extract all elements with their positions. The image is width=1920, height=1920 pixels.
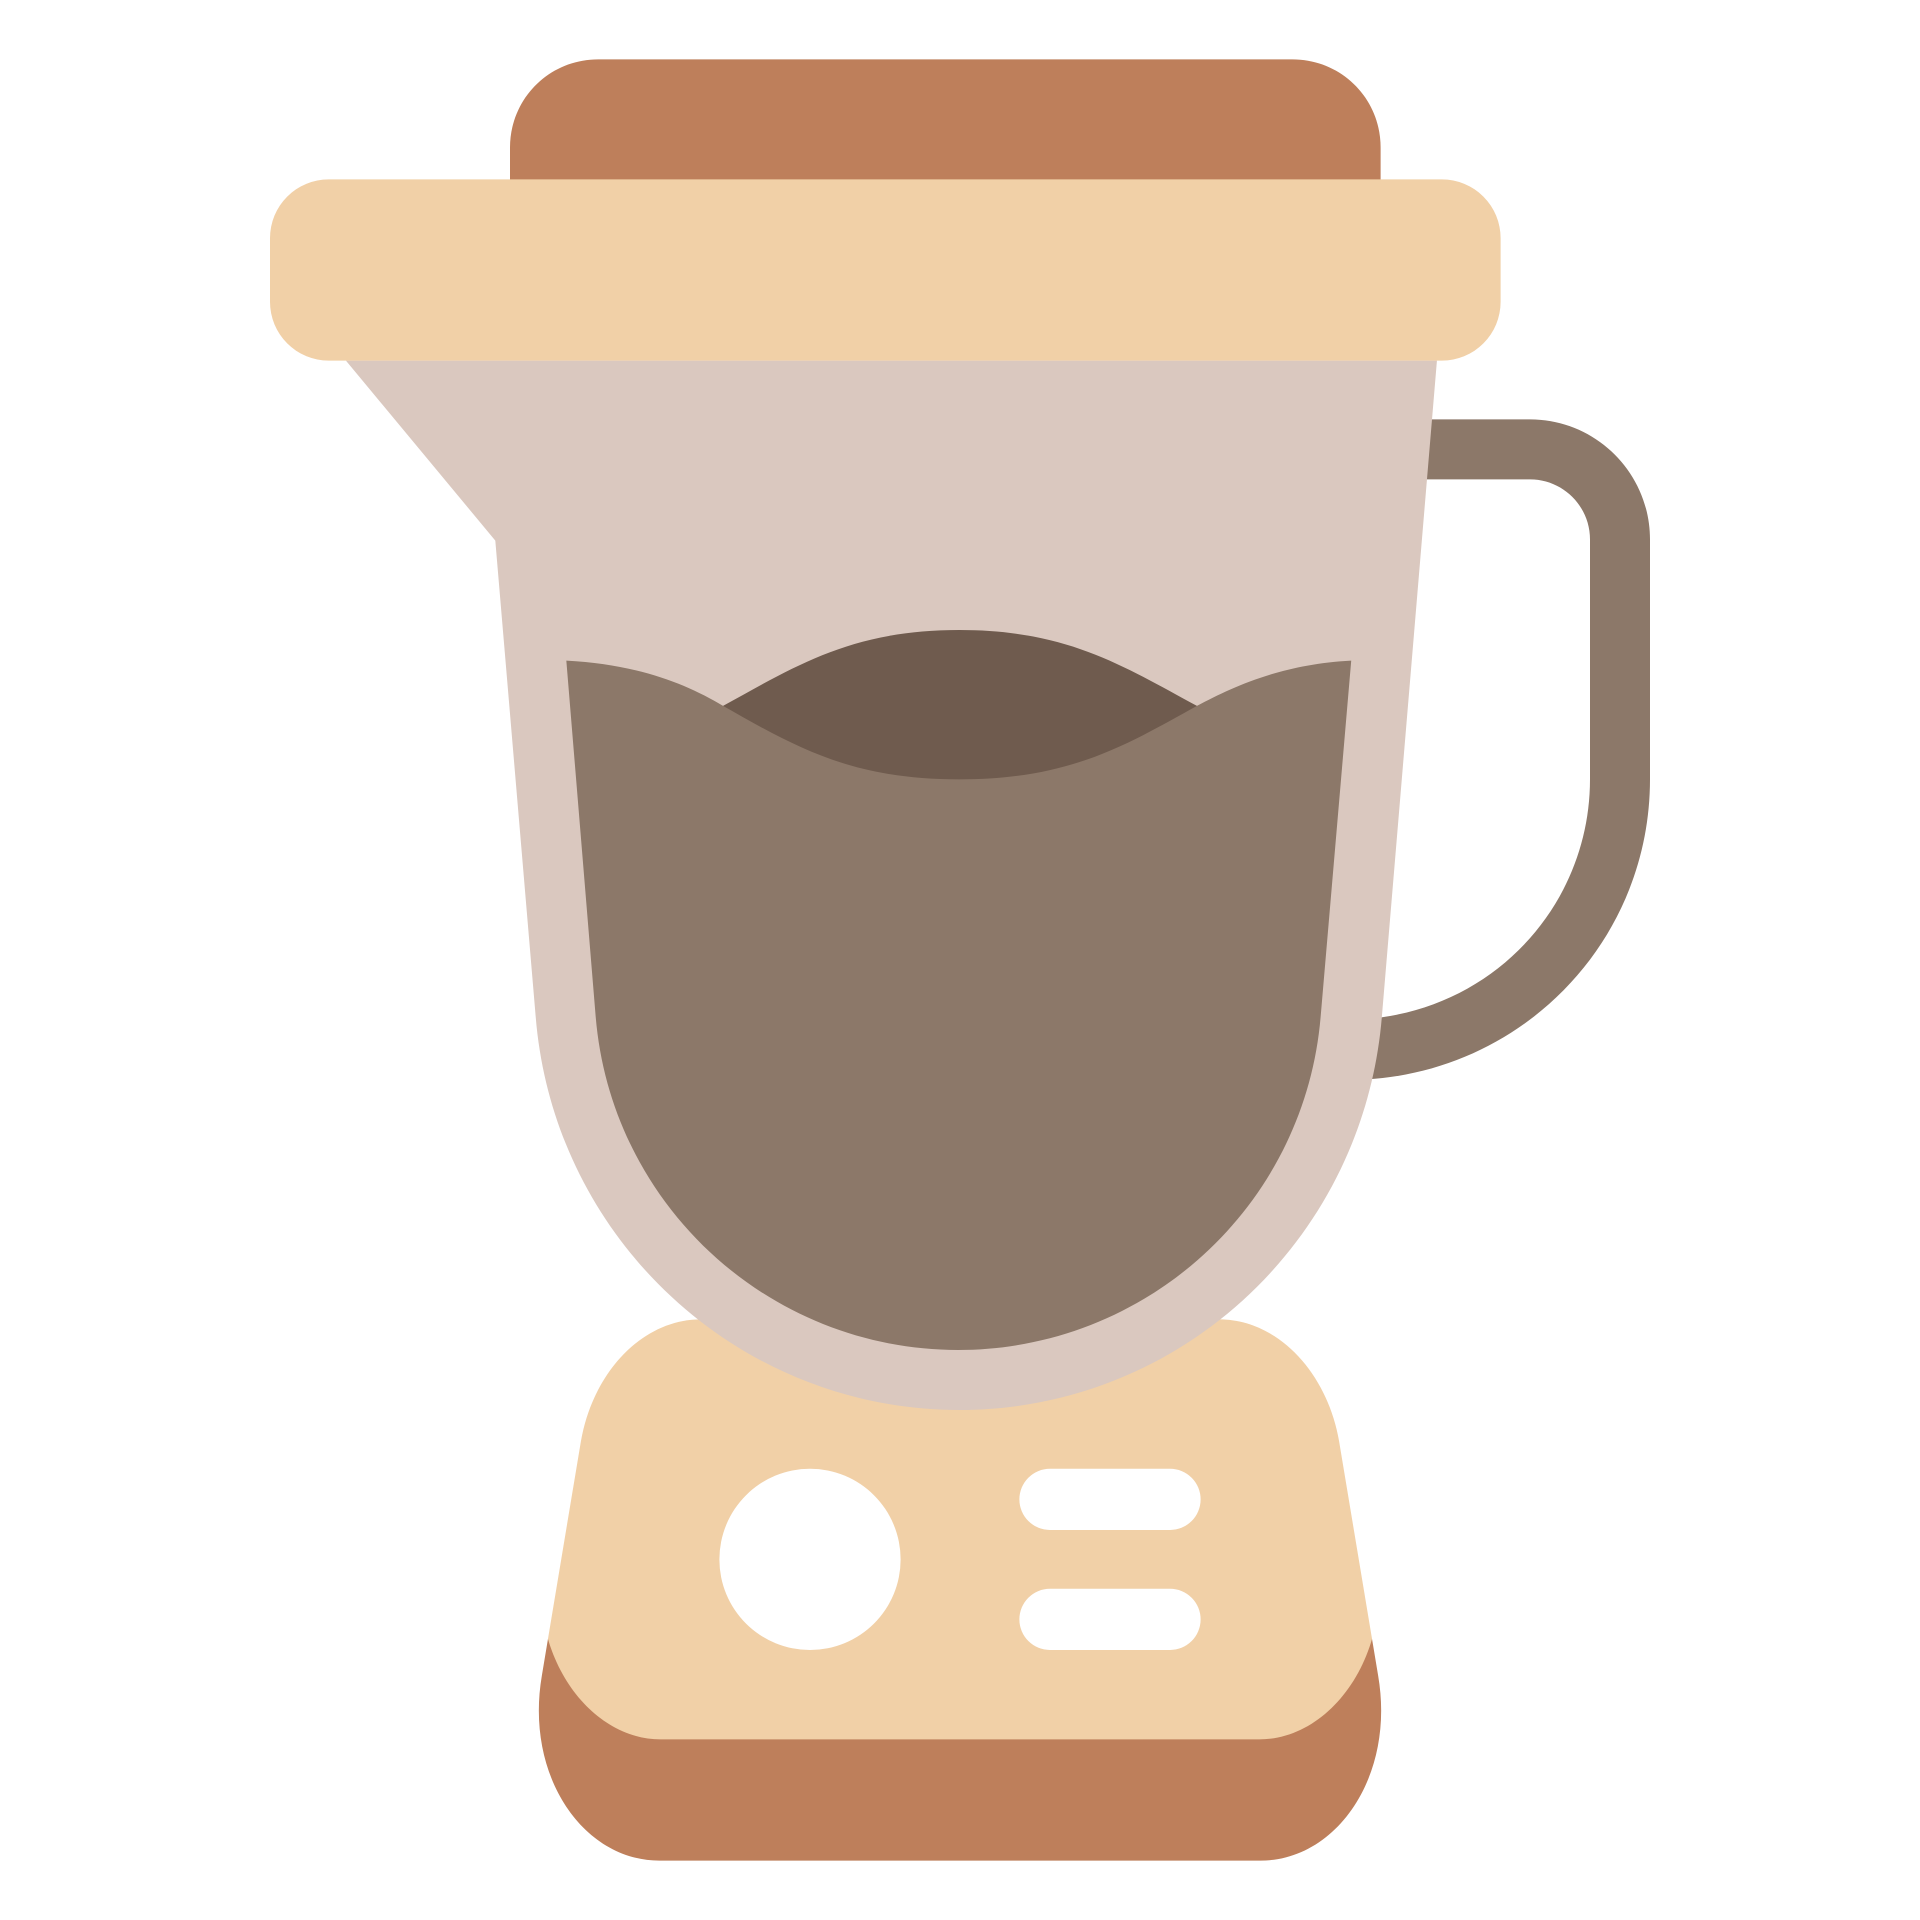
icon: jug handle [1367, 419, 1650, 1079]
icon: motor base body [548, 1319, 1372, 1739]
icon: back liquid surface [723, 630, 1197, 809]
icon: glass jug [346, 361, 1437, 1410]
icon: motor base lower shadow [539, 1592, 1381, 1861]
icon: lid [270, 179, 1501, 361]
icon: lid cap [510, 59, 1381, 197]
icon: control dial [719, 1469, 901, 1650]
icon: upper control button [1019, 1469, 1201, 1530]
icon: lower control button [1019, 1589, 1201, 1650]
icon: front liquid [566, 661, 1351, 1350]
